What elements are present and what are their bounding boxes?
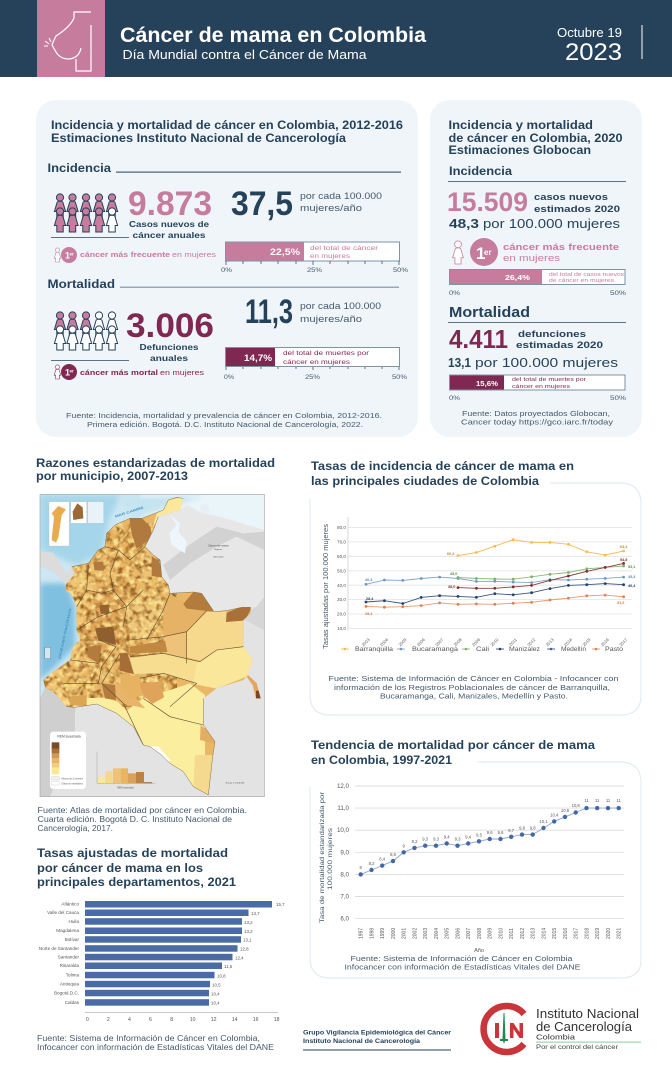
Colombia base [40,494,264,798]
line chart: mortality trend: 10,8 [572,803,580,808]
line chart: incidence by city: 63,4 [620,545,628,549]
line chart: incidence by city: 2005 [397,637,408,647]
line chart: mortality trend: 2008 [477,928,483,939]
map histogram: REM suavizada [117,787,134,789]
header band [0,0,672,77]
line chart: incidence by city: 30,0 [337,597,346,602]
bar chart: mortality by department: Santander [58,954,79,959]
bar chart: mortality by department: 14 [232,1017,238,1023]
heading: tendencia de mortalidad [311,738,595,767]
line chart: incidence by city: 28,4 [366,597,374,601]
heading: tasas ajustadas: por cáncer de mama en los [37,861,203,875]
line chart: mortality trend [319,783,624,954]
line chart: incidence by city: 10,0 [337,626,346,631]
bar chart: mortality by department: Antioquia [60,981,79,986]
map legend: Datos no estimables [62,782,84,785]
percentage bar: 26,4%: 0% [449,290,460,297]
line chart: incidence by city: 2014 [563,637,574,647]
bar chart: mortality by department: 13,1 [243,938,252,942]
stat: 3.006 deaths: 3.006 [126,307,214,345]
line chart: incidence by city: 70,0 [337,540,346,544]
stat: 15.509: 15.509 [447,187,528,217]
percentage bar: 26,4%: 50% [610,290,626,297]
source note: Infocancer con información de Estadísticas Vitales del DANE [344,962,580,972]
rate label [300,191,382,214]
panel heading: de cáncer en Colombia, 2020 [448,133,622,145]
map source note: Cancerología, 2017. [38,824,113,833]
line chart: mortality trend: 10,4 [550,812,559,818]
line chart: mortality trend: 11 [606,798,611,803]
bar chart: mortality by department: 4 [128,1017,131,1023]
bar chart: mortality by department: 10,8 [217,974,226,978]
line chart: mortality trend: 11,0 [337,805,350,812]
callout: primer cancer mas frecuente: 1 [65,250,70,260]
line chart: mortality trend: 1999 [380,928,386,939]
chart legend: Manizalez [509,647,540,653]
stat label: casos nuevos estimados: casos nuevos [534,192,608,203]
percentage bar: 15,6%: 50% [610,395,626,402]
callout: primer cancer mas frecuente: en mujeres [172,250,216,259]
line chart: mortality trend: 12,0 [337,783,350,790]
line chart: incidence by city: 50,0 [337,568,346,574]
line chart: incidence by city: 2003 [361,637,371,647]
line chart: mortality trend: 2006 [455,928,461,939]
line chart: mortality trend: 9,7 [508,828,515,833]
bar chart: mortality by department: Bolívar [65,937,79,942]
percentage bar: 22,5%: 25% [307,267,322,274]
line chart: mortality trend: 2002 [412,928,418,939]
line chart: mortality trend: 2014 [541,928,547,939]
line chart: incidence by city: 2010 [489,637,500,647]
line chart: mortality trend: 10,1 [539,819,548,824]
line chart: mortality trend: Tasa de mortalidad estandarizada por [319,792,326,923]
mortality rate label [300,301,381,325]
percentage bar: 26,4%: 26,4% [505,273,530,282]
bar chart: mortality by department: Bogotá D.C. [54,990,79,995]
header icon: breast outline on pink tile [37,0,105,77]
callout: primer cancer mas frecuente [54,247,216,263]
heading: tasas de incidencia [311,459,574,488]
line chart: mortality trend: 9,5 [476,832,483,838]
date: Octubre 19 [557,25,622,40]
line chart: incidence by city: 45,3 [628,575,635,579]
map source note [38,806,247,833]
heading: tendencia de mortalidad: en Colombia, 1997-2021 [311,753,452,767]
source note [344,954,580,972]
heading: tasas de incidencia: Tasas de incidencia de cáncer de mama en [311,459,574,473]
percentage bar: 14,7%: 0% [224,374,234,381]
bar chart source note [37,1034,274,1052]
bar chart: mortality by department: 2 [107,1017,110,1023]
map source note: Fuente: Atlas de mortalidad por cáncer en Colombia. [38,806,247,815]
icon: pictogram of ten women, mortality [54,312,118,350]
chart legend: Bucaramanga [412,647,459,653]
line chart: incidence by city: 20,0 [337,612,346,616]
line chart: mortality trend: 2009 [488,928,494,939]
percentage bar: 22,5%: en mujeres [310,253,351,260]
map labels [57,505,145,660]
stat label: casos nuevos: Casos nuevos de [129,220,210,229]
line chart: incidence by city: 2015 [581,637,592,647]
percentage bar: 15,6% [449,375,626,402]
callout: primer cancer mas frecuente [453,238,619,266]
panel heading: Estimaciones Globocan [448,145,591,157]
line chart: incidence by city: 2008 [453,637,463,647]
panel: incidence line chart card [310,483,641,715]
callout: primer cancer mas mortal: cáncer más mortal [80,368,158,377]
percentage bar: 22,5%: del total de cáncer [310,245,379,252]
logo: Instituto Nacional de Cancerologia: Colombia [536,1034,575,1042]
line chart: mortality trend: 11 [584,798,589,803]
line chart: mortality trend: 9 [403,844,406,848]
percentage bar: 15,6%: 15,6% [476,379,498,388]
chart legend: Cali [476,647,489,653]
main title: Cáncer de mama en Colombia [120,24,426,47]
rate label: mujeres/año [300,203,362,214]
source note: información de los Registros Poblacionales de cáncer de Barranquilla, [334,683,610,692]
line chart: incidence by city: 2013 [545,637,555,647]
logo: Instituto Nacional de Cancerologia: Por el control del cáncer [536,1044,619,1051]
rate: 48,3 [449,216,621,231]
line chart: incidence by city: 31,6 [617,601,624,605]
source note: Primera edición. Bogotá. D.C. Instituto Nacional de Cancerología, 2022. [87,420,363,429]
bar chart: mortality by department: Risaralda [60,963,79,968]
stat: 11,3 rate: 11,3 [245,293,293,331]
icon: pictogram of ten women, incidence [54,194,118,232]
map legend: Menos de 3 muertes [62,777,84,780]
bar chart: mortality by department: 6 [149,1017,152,1023]
percentage bar: 26,4% [449,270,626,297]
bar chart: mortality by department: 10 [190,1017,196,1023]
map: mortality ratio by municipality: Mujeres [214,548,222,551]
stat label: defunciones: Defunciones [140,343,199,352]
map histogram [97,752,155,789]
line chart: mortality trend: 6,0 [340,916,350,922]
heading: tasas ajustadas: Tasas ajustadas de mortalidad [37,846,228,860]
line chart: mortality trend: 2015 [552,928,558,939]
callout: primer cancer mas mortal [54,364,204,380]
line chart: mortality trend: 1997 [358,928,364,939]
line chart: incidence by city: 2012 [526,637,537,647]
bar chart source note: Infocancer con información de Estadísticas Vitales del DANE [37,1043,274,1052]
line chart: mortality trend: 2020 [606,928,612,939]
percentage bar: 22,5% [221,242,408,274]
bar chart: mortality by department: 15,7 [276,902,285,907]
percentage bar: 15,6%: cáncer en mujeres [512,384,570,390]
footer credit: Instituto Nacional de Cancerología [303,1038,421,1045]
line chart: mortality trend: 8,2 [369,861,375,866]
percentage bar: 14,7% [224,348,407,381]
map: mortality ratio by municipality: Cáncer de mama [208,544,229,548]
line chart: mortality trend: 8,0 [340,872,350,878]
panel heading [51,120,403,145]
callout: primer cancer mas frecuente: er [484,248,492,257]
chart legend [341,647,624,653]
percentage bar: 15,6%: 0% [449,395,460,402]
bar chart: mortality by department: 0 [86,1017,89,1023]
panel: Globocan 2020 [430,100,642,437]
source note [461,409,613,426]
footer credit: Grupo Vigilancia Epidemiológica del Cáncer [303,1030,452,1036]
bar chart: mortality by department: 12,8 [240,946,249,952]
heading: tendencia de mortalidad: Tendencia de mortalidad por cáncer de mama [311,738,595,752]
subtitle: Día Mundial contra el Cáncer de Mama [122,47,367,62]
rate: 13,1 [448,355,619,370]
line chart: mortality trend: 11 [617,798,622,803]
line chart: incidence by city [323,517,636,649]
line chart: incidence by city: 2004 [379,637,390,647]
line chart: mortality trend: 100.000 mujeres [327,828,334,890]
line chart: mortality trend: 10,6 [561,808,570,813]
percentage bar: 15,6%: del total de muertes por [512,377,586,383]
logo: Instituto Nacional de Cancerologia: de Cancerología [536,1019,633,1034]
line chart: incidence by city: 40,4 [628,584,636,588]
source note: Bucaramanga, Cali, Manizales, Medellín y Pasto. [380,692,568,700]
rate: 48,3: 48,3 [449,216,479,231]
stat: 37,5 rate: 37,5 [231,185,293,223]
bar chart: mortality by department: Magdalena [56,928,79,933]
logo: Instituto Nacional de Cancerologia: Instituto Nacional [536,1006,639,1021]
percentage bar: 14,7%: cáncer en mujeres [283,359,351,366]
rate: 13,1: por 100.000 mujeres [475,355,619,370]
chart legend: Barranquilla [355,647,394,653]
line chart: mortality trend: 8,4 [379,856,386,862]
line chart: mortality trend: 9,6 [498,830,504,835]
panel: incidencia y mortalidad 2012-2016 [36,100,418,437]
line chart: mortality trend: 8,6 [390,852,397,857]
date [557,25,622,66]
percentage bar: 14,7%: 25% [305,374,320,381]
panel: trend line chart card [310,762,641,978]
line chart: mortality trend: 2000 [391,928,397,939]
line chart: mortality trend: 2001 [402,928,408,939]
chart legend: Pasto [605,647,624,653]
percentage bar: 26,4%: de cáncer en mujeres [549,278,615,284]
line chart: mortality trend: 9,4 [465,834,472,840]
line chart: mortality trend: 11 [595,798,600,803]
stat label: casos nuevos: cáncer anuales [132,231,206,240]
bar chart: mortality by department [39,901,285,1023]
heading: tasas ajustadas: principales departamentos, 2021 [37,875,236,889]
map legend: REM suavizada [57,734,81,738]
mortality rate label: por cada 100.000 [300,301,381,312]
map: mortality ratio by municipality: Escala 1:7.500.000 [226,782,245,784]
stat label: defunciones estimadas: defunciones [518,329,586,340]
bar chart: mortality by department: Valle del Cauca [47,910,79,915]
percentage bar: 14,7%: 14,7% [244,353,273,364]
line chart: incidence by city: 2017 [618,637,629,647]
footer credit [303,1030,452,1050]
line chart: incidence by city: 60,2 [447,552,454,556]
map labels: MAR CARIBE [114,505,145,519]
source note: Fuente: Datos proyectados Globocan, [462,409,610,418]
municipal mottling [43,523,177,707]
line chart: mortality trend: 9,2 [412,839,418,844]
line chart: mortality trend: 2010 [498,928,504,939]
line chart: incidence by city: 2007 [434,637,445,647]
line chart: incidence by city: 2009 [471,637,482,647]
line chart: mortality trend: 2013 [530,928,536,939]
bar chart source note: Fuente: Sistema de Información de Cáncer en Colombia, [37,1034,260,1043]
line chart: mortality trend: 7,0 [340,894,350,900]
line chart: incidence by city: 60,0 [337,554,346,559]
line chart: mortality trend: 2021 [616,928,622,939]
date: 2023 [565,39,622,66]
stat label: casos nuevos estimados: estimados 2020 [534,204,620,215]
callout: primer cancer mas frecuente: 1 [476,244,485,263]
callout: primer cancer mas frecuente: cáncer más frecuente [503,242,619,253]
line chart: mortality trend: 9,0 [340,850,350,856]
callout: primer cancer mas mortal: en mujeres [160,368,204,377]
line chart: incidence by city: 40,0 [337,583,346,588]
callout: primer cancer mas frecuente: cáncer más frecuente [80,250,170,259]
rate: 48,3: por 100.000 mujeres [483,216,621,231]
section heading: Incidencia: Incidencia [48,161,111,175]
callout: primer cancer mas frecuente: er [70,252,74,256]
bar chart: mortality by department: Huila [69,919,79,924]
line chart: incidence by city: 25,4 [365,612,373,616]
logo: Instituto Nacional de Cancerologia [484,1006,641,1052]
bar chart: mortality by department: 13,2 [244,929,253,934]
map source note: Cuarta edición. Bogotá D. C. Instituto Nacional de [38,815,233,824]
percentage bar: 22,5%: 0% [221,267,232,274]
line chart: incidence by city: 45,0 [450,572,457,576]
stat: 4.411: 4.411 [449,324,508,354]
rate label: por cada 100.000 [300,191,382,202]
line chart: mortality trend: 2003 [423,928,429,939]
source note [66,411,382,429]
line chart: mortality trend: 1998 [369,928,375,939]
insets [45,502,104,659]
percentage bar: 26,4%: del total de casos nuevos [549,272,625,278]
section heading: Mortalidad: Mortalidad [48,277,115,291]
line chart: incidence by city: 2006 [416,637,426,647]
line chart: mortality trend: 9,3 [455,836,461,842]
panel heading [448,120,622,157]
bar chart: mortality by department: 13,7 [251,911,260,916]
chart legend: Medellín [561,647,586,653]
line chart: mortality trend: 2011 [509,928,515,939]
line chart: mortality trend: 2005 [444,928,450,939]
line chart: mortality trend: 2012 [520,928,526,939]
line chart: mortality trend: 9,3 [422,836,429,842]
line chart: mortality trend: 2019 [595,928,601,939]
stat label: casos nuevos [129,220,210,240]
map legend [50,732,86,789]
bar chart: mortality by department: Atlántico [61,902,79,906]
heading: razones estandarizadas: Razones estandarizadas de mortalidad [36,458,275,470]
heading: razones estandarizadas: por municipio, 2007-2013 [36,471,188,483]
line chart: mortality trend: 2017 [574,928,580,939]
bar chart: mortality by department: Tolima [66,972,79,977]
line chart: incidence by city: 2016 [600,637,610,647]
heading: tasas de incidencia: las principales ciudades de Colombia [311,474,539,488]
source note: Fuente: Incidencia, mortalidad y prevalencia de cáncer en Colombia, 2012-2016. [66,411,382,420]
bar chart: mortality by department: 12 [211,1017,217,1023]
line chart: incidence by city: 53,1 [628,565,635,569]
source note: Cancer today https://gco.iarc.fr/today [461,418,613,426]
source note: Fuente: Sistema de Información de Cáncer en Colombia [350,954,573,963]
bar chart: mortality by department: 18 [274,1017,280,1023]
line chart: mortality trend: 2016 [563,928,569,939]
stat label: defunciones [140,343,199,363]
callout: primer cancer mas mortal: er [70,368,74,374]
percentage bar: 22,5%: 50% [393,267,408,274]
line chart: incidence by city: Tasas ajustadas por 100.000 mujeres [323,523,330,649]
map: mortality ratio by municipality: 2007-2013 [213,556,224,558]
heading: tasas ajustadas [37,846,236,889]
bar chart: mortality by department: 10,5 [212,982,221,988]
line chart: incidence by city: 40,3 [365,578,372,582]
line chart: mortality trend: 9,3 [433,836,440,842]
bar chart: mortality by department: 13,2 [244,920,253,925]
callout: primer cancer mas mortal: 1 [65,368,70,378]
line chart: incidence by city: 54,8 [620,558,627,562]
source note [328,674,618,700]
heading: razones estandarizadas [36,458,275,483]
bar chart: mortality by department: Norte de Santander [39,946,79,951]
line chart: mortality trend: 9,6 [487,830,493,835]
panel heading: Incidencia y mortalidad [448,120,593,132]
boundaries [63,497,251,795]
callout: primer cancer mas frecuente: en mujeres [503,253,560,264]
line chart: mortality trend: 10,0 [337,827,350,834]
map labels: OCÉANO PACÍFICO [57,607,73,660]
line chart: mortality trend: 2004 [434,928,440,939]
bar chart: mortality by department: 10,4 [211,992,220,996]
rate: 13,1: 13,1 [448,355,471,370]
line chart: mortality trend: 2007 [466,928,472,939]
bar chart: mortality by department: Caldas [65,1000,80,1005]
percentage bar: 14,7%: del total de muertes por [283,350,370,357]
source note: Fuente: Sistema de Información de Cáncer en Colombia - Infocancer con [328,674,618,683]
line chart: mortality trend: Año [474,948,484,954]
stat label: casos nuevos estimados [534,192,620,215]
line chart: mortality trend: 2018 [584,928,590,939]
panel heading: Estimaciones Instituto Nacional de Cancerología [51,133,347,145]
bar chart: mortality by department: 8 [170,1017,173,1023]
percentage bar: 22,5%: 22,5% [270,247,301,258]
percentage bar: 14,7%: 50% [392,374,407,381]
section heading: Mortalidad: Mortalidad [449,304,530,321]
stat label: defunciones: anuales [150,354,189,363]
map: mortality ratio by municipality [40,494,264,798]
line chart: mortality trend: 9,8 [530,826,536,830]
bar chart: mortality by department: 11,5 [224,964,233,969]
stat: 9.873 cases: 9.873 [128,185,212,223]
mortality rate label: mujeres/año [300,314,362,325]
stat label: defunciones estimadas [516,329,603,351]
line chart: mortality trend: 9,4 [444,834,450,840]
panel heading: Incidencia y mortalidad de cáncer en Colombia, 2012-2016 [51,120,403,132]
stat label: defunciones estimadas: estimadas 2020 [516,340,603,351]
line chart: incidence by city: 38,0 [448,585,455,589]
line chart: mortality trend: 8 [360,865,363,870]
logo mark [484,1006,524,1052]
bar chart: mortality by department: 10,4 [211,1000,220,1006]
line chart: incidence by city: 2011 [508,637,518,647]
line chart: incidence by city: 80,0 [337,525,346,530]
section heading: Incidencia: Incidencia [449,164,512,178]
line chart: mortality trend: 9,8 [519,826,526,830]
bar chart: mortality by department: 16 [253,1017,259,1023]
bar chart: mortality by department: 12,4 [235,956,244,960]
